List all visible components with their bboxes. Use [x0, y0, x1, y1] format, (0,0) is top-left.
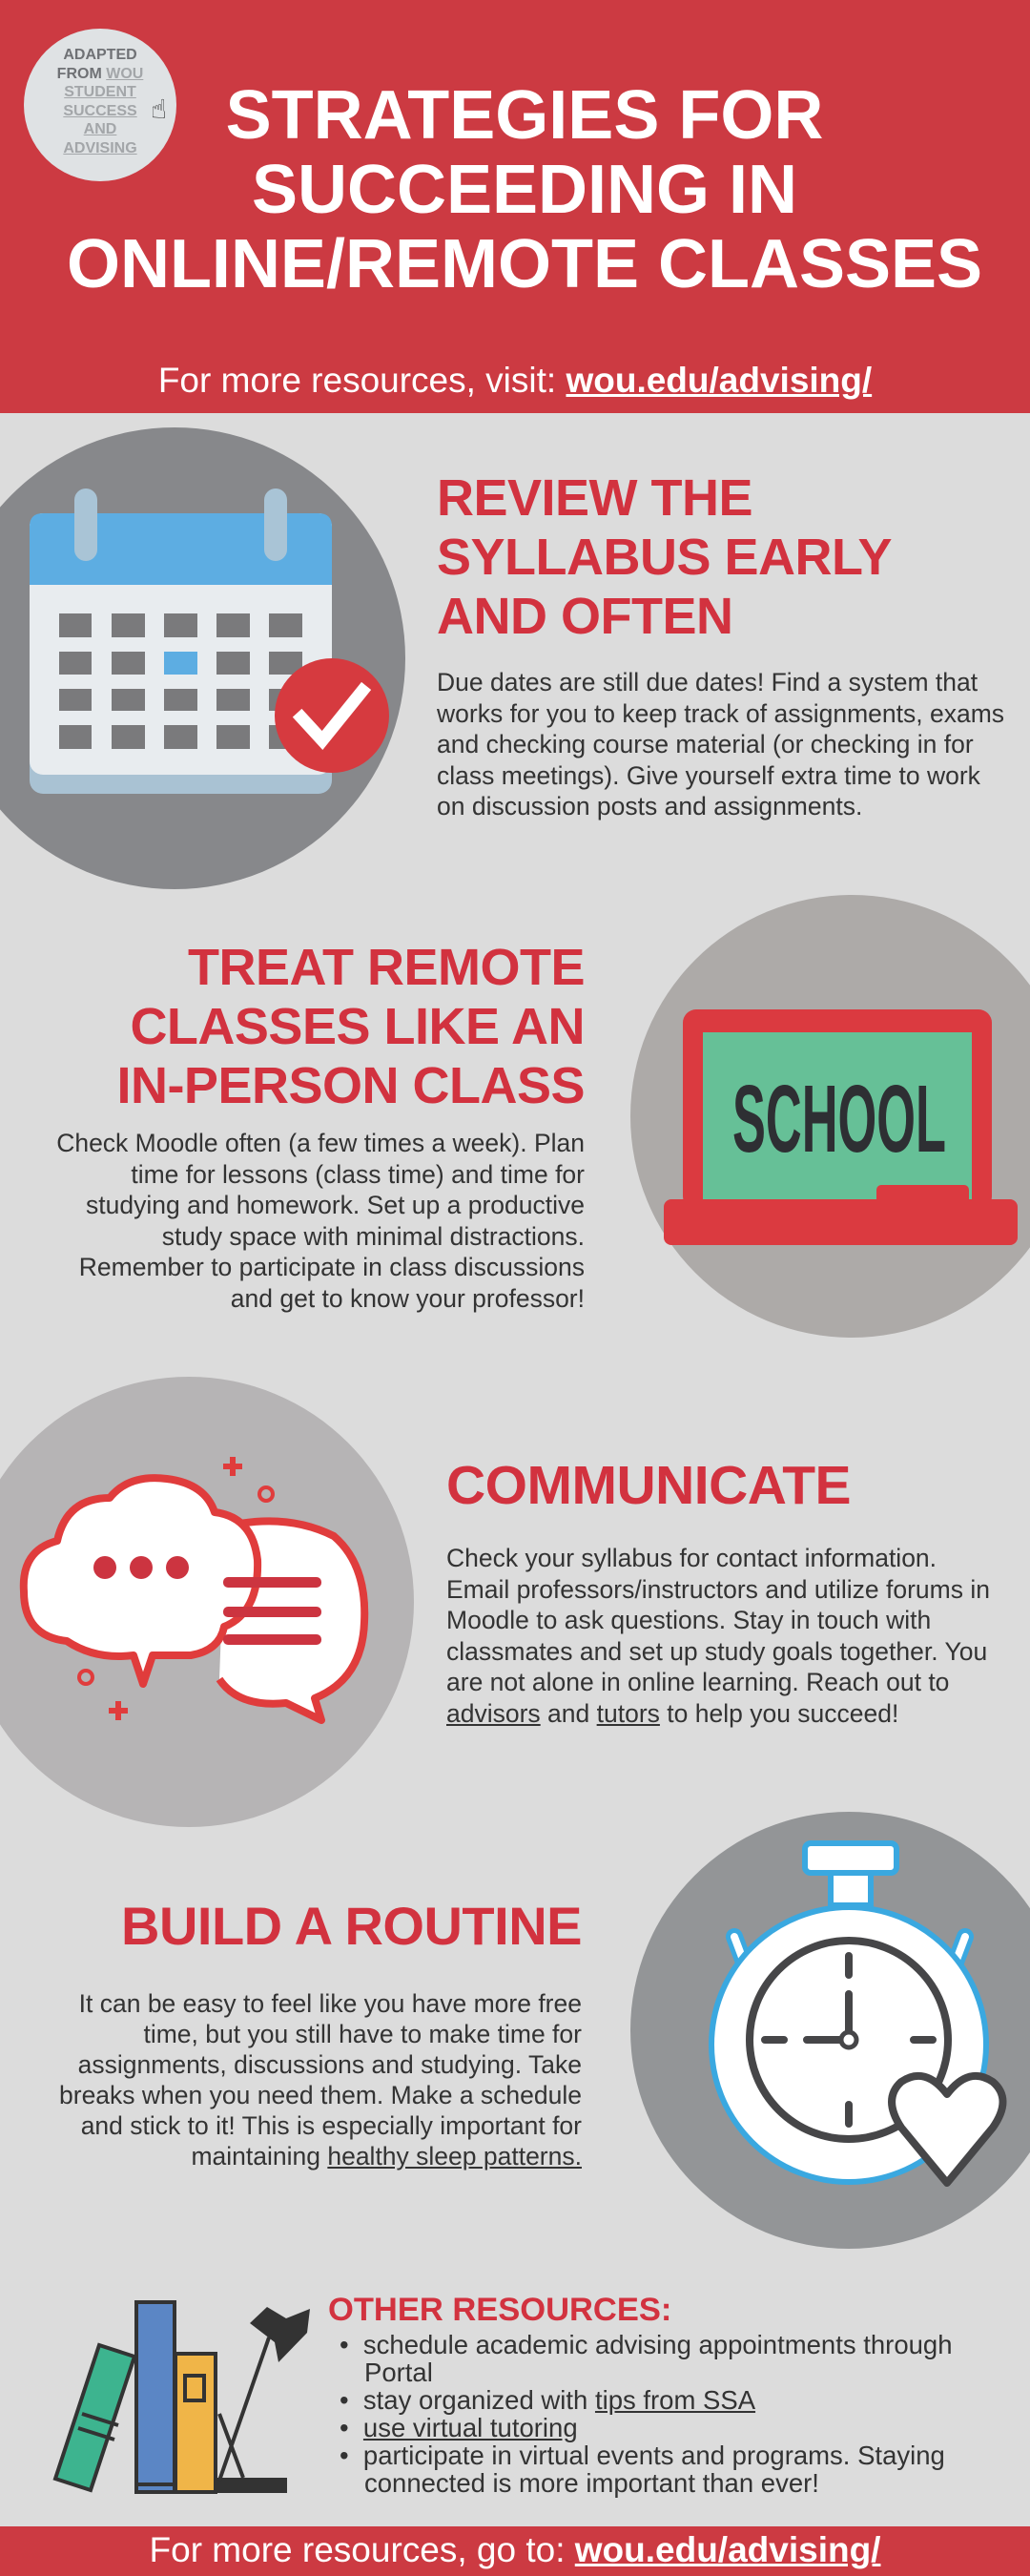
title: SUCCEEDING IN [252, 152, 797, 228]
badge: adapted from: AND [84, 121, 116, 137]
list: other resources: connected is more important than ever! [364, 2468, 819, 2498]
badge: adapted from: FROM WOU [57, 65, 143, 82]
heading: treat remote classes: IN-PERSON CLASS [116, 1057, 585, 1114]
list: other resources: Portal [364, 2358, 433, 2387]
text: build a routine: It can be easy to feel like you have more free [79, 1989, 582, 2018]
text: treat remote classes: studying and homework. Set up a productive [86, 1191, 585, 1219]
list: other resources: • schedule academic advising appointments through [340, 2330, 953, 2359]
text: review the syllabus: and checking course material (or checking in for [437, 730, 974, 758]
heading: review the syllabus: REVIEW THE [437, 469, 752, 527]
text: build a routine [59, 1989, 582, 2171]
text: treat remote classes: Check Moodle often (a few times a week). Plan [56, 1129, 585, 1157]
badge: adapted from: SUCCESS [63, 103, 137, 118]
text: communicate: classmates and set up study goals together. You [446, 1637, 987, 1666]
badge: adapted from: ADVISING [63, 139, 137, 156]
text: build a routine: assignments, discussions and studying. Take [78, 2050, 582, 2079]
badge: adapted from: ADAPTED [63, 47, 137, 63]
heading: treat remote classes: TREAT REMOTE [188, 939, 585, 996]
footer text: For more resources, go to: wou.edu/advising/ [150, 2530, 880, 2569]
header band [0, 0, 1030, 413]
heading: build a routine: BUILD A ROUTINE [121, 1896, 582, 1956]
list: other resources: • participate in virtual events and programs. Staying [340, 2441, 945, 2470]
list: other resources: • stay organized with tips from SSA [340, 2385, 755, 2415]
icon: hand cursor: ☝ [151, 93, 167, 125]
badge: adapted from: STUDENT [64, 84, 136, 100]
text: review the syllabus: Due dates are still due dates! Find a system that [437, 668, 978, 696]
badge: adapted from [57, 47, 143, 156]
text: build a routine: and stick to it! This is especially important for [81, 2111, 582, 2140]
list: other resources [340, 2330, 953, 2498]
list: other resources: • use virtual tutoring [340, 2413, 578, 2442]
heading: communicate: COMMUNICATE [446, 1455, 851, 1516]
text: communicate: advisors and tutors to help you succeed! [446, 1698, 898, 1727]
heading: treat remote classes [116, 939, 585, 1114]
text: communicate: Check your syllabus for contact information. [446, 1544, 937, 1572]
text: communicate: Email professors/instructors and utilize forums in [446, 1574, 990, 1603]
icon: chat bubbles [0, 1377, 414, 1827]
text: treat remote classes: and get to know your professor! [231, 1284, 585, 1313]
title: STRATEGIES FOR [226, 77, 823, 154]
text: treat remote classes: time for lessons (class time) and time for [131, 1160, 585, 1189]
heading: review the syllabus [437, 469, 892, 645]
text: review the syllabus: works for you to keep track of assignments, exams [437, 698, 1004, 727]
title: ONLINE/REMOTE CLASSES [67, 226, 982, 302]
text: build a routine: maintaining healthy sleep patterns. [191, 2142, 582, 2171]
icon: school board [630, 895, 1030, 1338]
badge circle [24, 29, 176, 181]
title [67, 77, 982, 302]
text: communicate: Moodle to ask questions. Stay in touch with [446, 1606, 931, 1634]
heading: treat remote classes: CLASSES LIKE AN [130, 998, 585, 1055]
subtitle link: For more resources, visit: wou.edu/advising/ [158, 361, 872, 400]
text: build a routine: time, but you still have to make time for [143, 2020, 582, 2048]
text: review the syllabus: class meetings). Give yourself extra time to work [437, 761, 980, 790]
text: review the syllabus: on discussion posts and assignments. [437, 792, 862, 821]
icon: calendar [0, 427, 405, 889]
heading: other resources: OTHER RESOURCES: [328, 2292, 671, 2328]
heading: review the syllabus: AND OFTEN [437, 588, 732, 645]
text: treat remote classes: study space with minimal distractions. [162, 1221, 585, 1250]
text: communicate [446, 1544, 990, 1727]
icon: books and lamp [55, 2302, 310, 2493]
text: review the syllabus [437, 668, 1004, 821]
heading: review the syllabus: SYLLABUS EARLY [437, 529, 892, 586]
text: build a routine: breaks when you need them. Make a schedule [59, 2081, 582, 2109]
icon: stopwatch with heart [630, 1812, 1030, 2249]
text: treat remote classes: Remember to participate in class discussions [79, 1253, 585, 1281]
text: communicate: are not alone in online learning. Reach out to [446, 1668, 949, 1696]
footer band [0, 2526, 1030, 2576]
text: treat remote classes [56, 1129, 585, 1313]
